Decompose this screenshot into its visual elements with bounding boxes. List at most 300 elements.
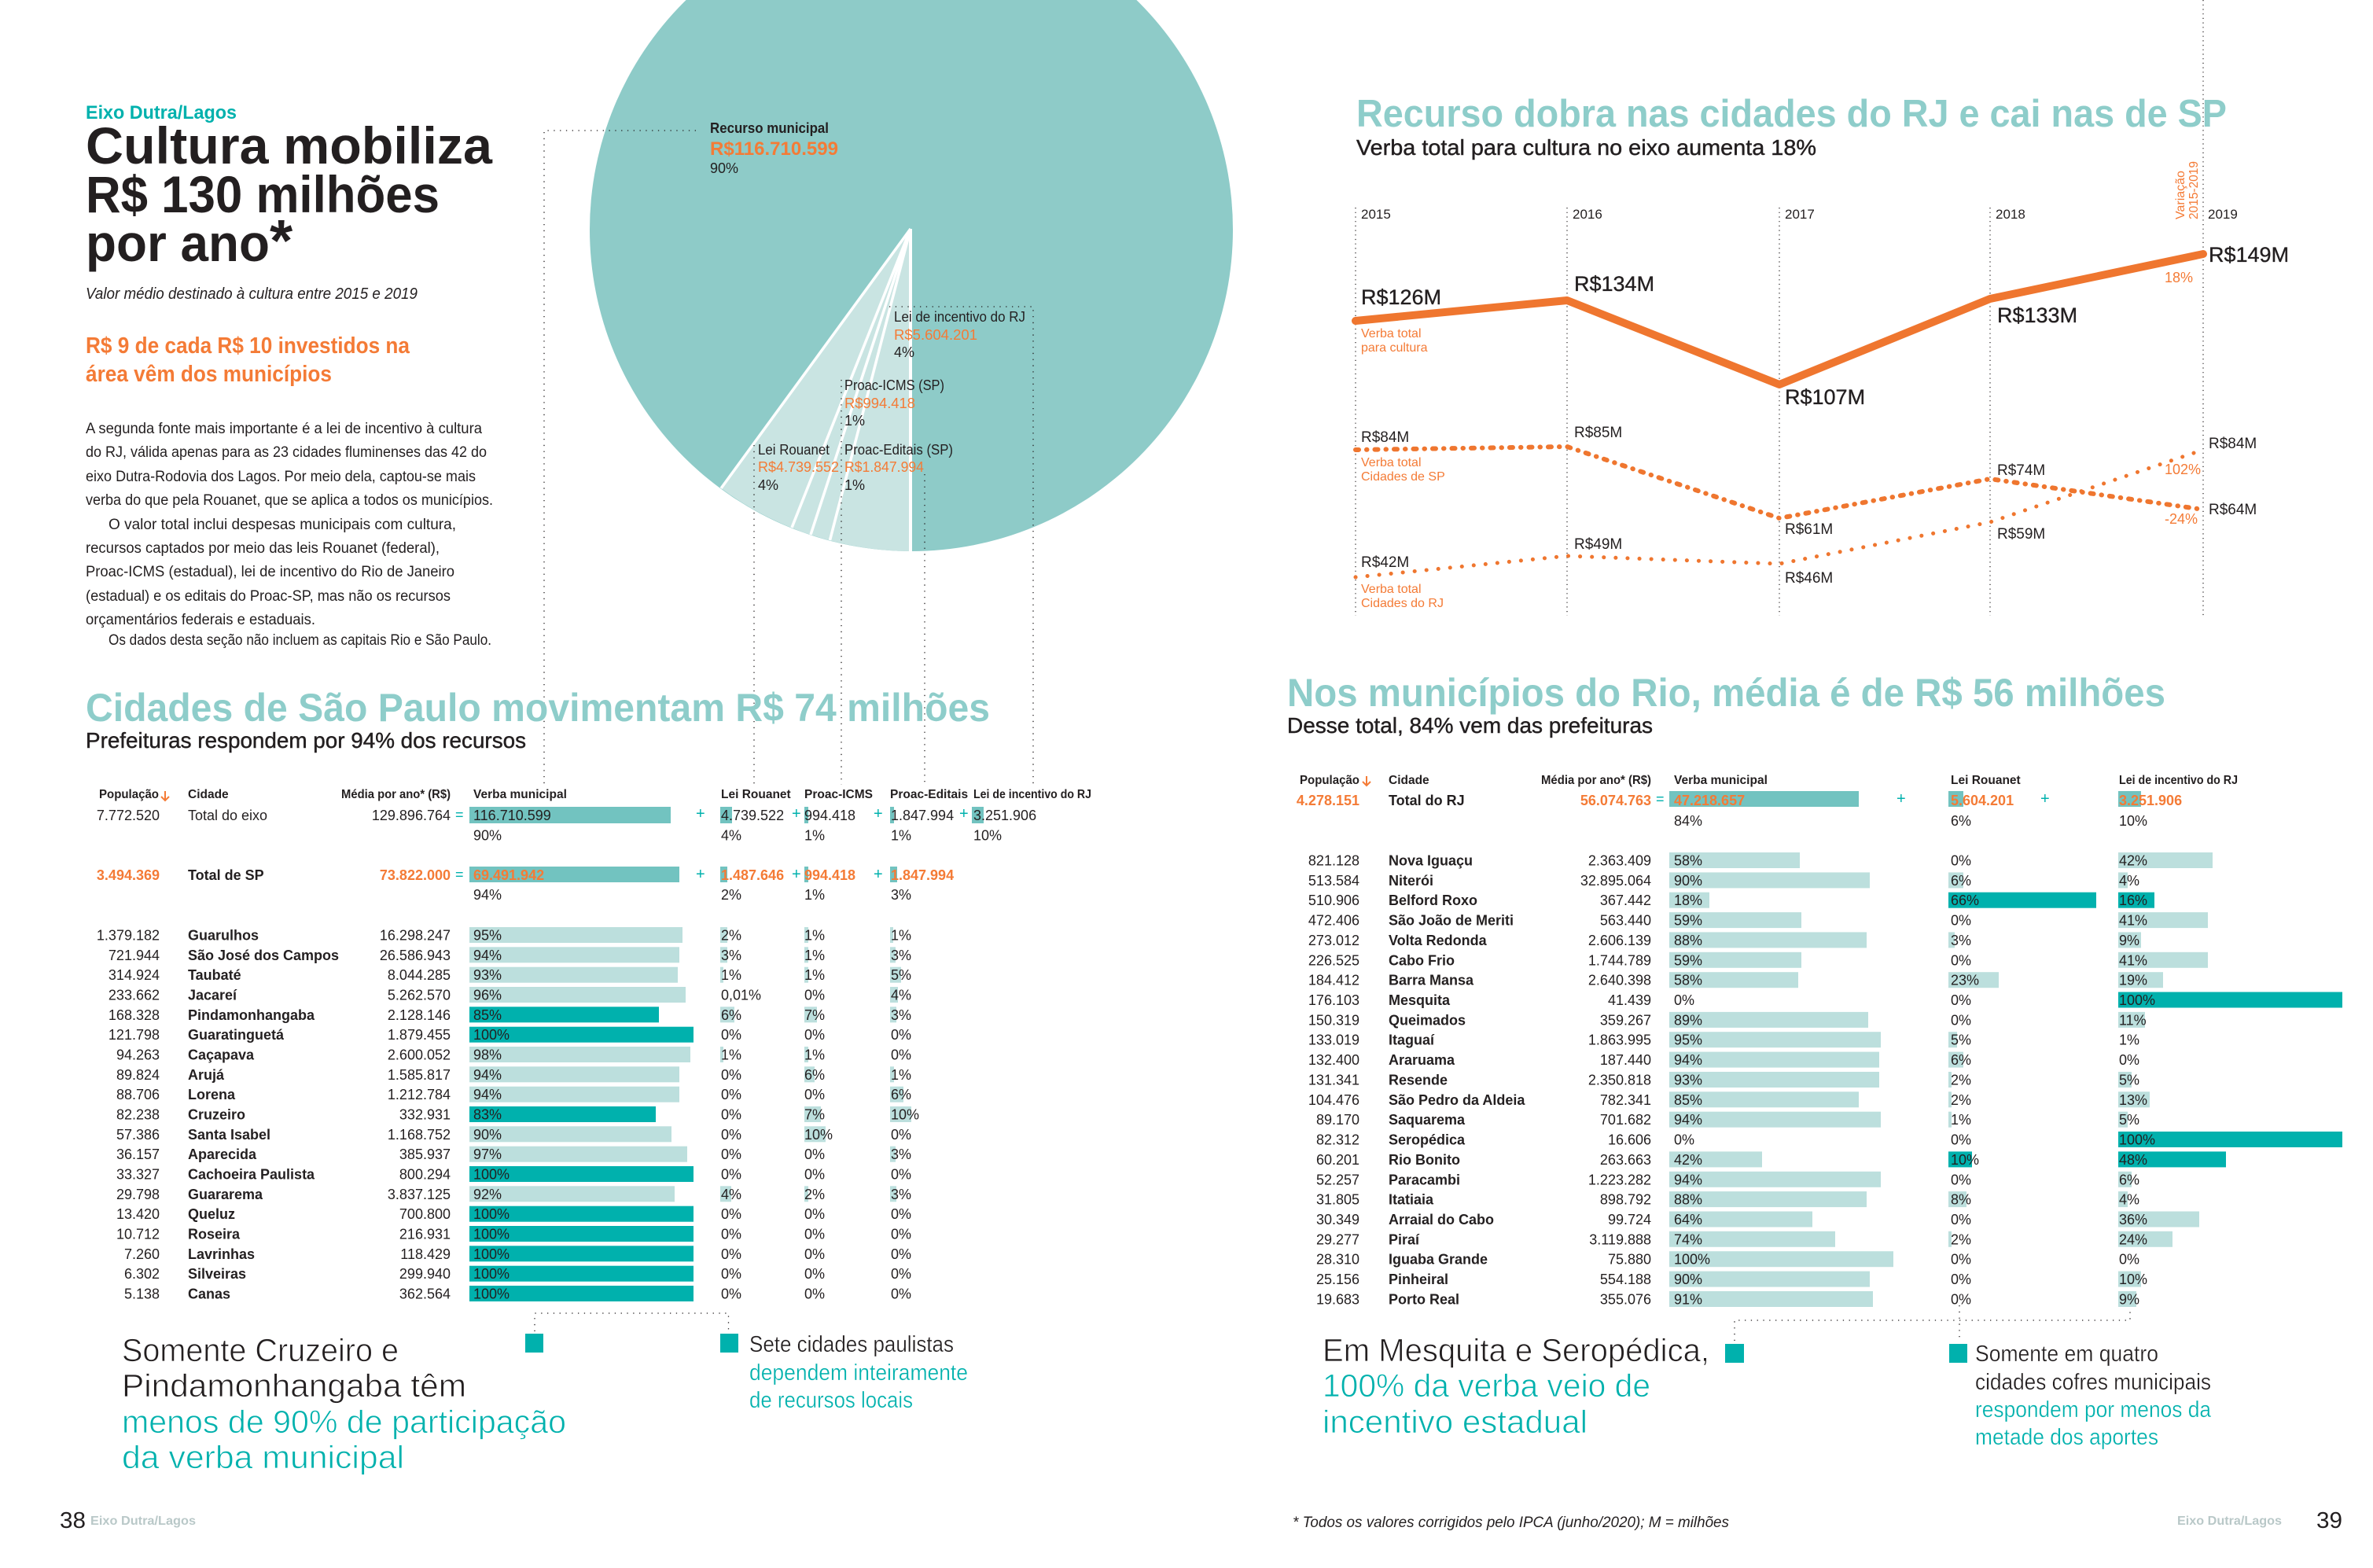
row: Santa Isabel: 1.168.752 xyxy=(388,1127,451,1143)
row: São João de Meriti: 563.440 xyxy=(1600,913,1651,929)
row: Itaguaí: 95% xyxy=(1674,1032,1702,1048)
row: total do eixo: + xyxy=(874,805,883,823)
pie label: Recurso municipal xyxy=(710,120,838,176)
row: Mesquita: 176.103 xyxy=(1308,992,1359,1008)
row: Arujá xyxy=(116,1066,911,1083)
row: Rio Bonito: 263.663 xyxy=(1600,1152,1651,1168)
series: cities of RJ: R$42M xyxy=(1361,554,1409,571)
pie label: Proac-Editais: 1% xyxy=(844,477,865,493)
table header: População xyxy=(99,788,159,801)
pie label: Lei de incentivo do RJ: R$5.604.201 xyxy=(894,327,977,343)
row: Paracambi: 6% xyxy=(2119,1172,2139,1187)
series: cities of RJ xyxy=(1356,436,2257,610)
footer right xyxy=(2177,1508,2342,1533)
pie label: Recurso municipal: Recurso municipal xyxy=(710,120,829,136)
row: Volta Redonda: 88% xyxy=(1674,933,1702,948)
row: Itatiaia: 4% xyxy=(2119,1192,2139,1208)
line chart: total funding 2015-2019 xyxy=(1356,0,2289,616)
row: Araruama: 0% xyxy=(2119,1052,2139,1068)
row: Araruama: Araruama xyxy=(1389,1052,1455,1068)
row: Roseira: 0% xyxy=(721,1227,741,1242)
row: total do RJ: 84% xyxy=(1674,813,1702,829)
row: Mesquita: 0% xyxy=(1674,992,1694,1008)
pie label: Recurso municipal: R$116.710.599 xyxy=(710,138,838,160)
footer left: 38 xyxy=(60,1508,86,1533)
row: Cruzeiro xyxy=(116,1106,919,1123)
callout: Somente em quatro cidades: metade dos aportes xyxy=(1975,1425,2158,1450)
row: total de SP: 1.847.994 xyxy=(891,867,954,883)
row: Porto Real: 19.683 xyxy=(1316,1291,1359,1307)
row: Nova Iguaçu: 821.128 xyxy=(1308,852,1359,868)
row: Barra Mansa: 184.412 xyxy=(1308,973,1359,988)
row: Arujá: 89.824 xyxy=(116,1067,160,1083)
series: cities of RJ: Cidades do RJ xyxy=(1361,597,1444,610)
pie label: Lei de incentivo do RJ: 4% xyxy=(894,344,914,360)
row: Rio Bonito: 60.201 xyxy=(1316,1152,1359,1168)
row: Piraí: Piraí xyxy=(1389,1231,1420,1247)
row: Queimados: 89% xyxy=(1674,1012,1702,1028)
row: Pinheiral: 554.188 xyxy=(1600,1272,1651,1287)
row: São José dos Campos xyxy=(109,947,911,963)
row: total de SP: = xyxy=(455,867,464,882)
row: Jacareí: 96% xyxy=(473,988,502,1003)
pie label: Lei Rouanet: R$4.739.552 xyxy=(758,459,839,475)
row: Queluz: 700.800 xyxy=(399,1206,451,1222)
callout: Sete cidades paulistas xyxy=(720,1332,968,1413)
row: Guarulhos: 1% xyxy=(804,928,825,944)
row: Nova Iguaçu: Nova Iguaçu xyxy=(1389,852,1473,868)
row: Taubaté: 1% xyxy=(804,967,825,983)
row: total do RJ xyxy=(1297,790,2182,829)
row: Iguaba Grande: 28.310 xyxy=(1316,1252,1359,1268)
row: total do eixo: 4.739.522 xyxy=(721,808,784,823)
row: total de SP: 994.418 xyxy=(804,867,855,883)
body text: recursos captados por meio das leis Rouanet (federal), xyxy=(86,540,440,557)
row: Guarulhos: 2% xyxy=(721,928,741,944)
row: Nova Iguaçu xyxy=(1308,852,2213,868)
row: total de SP: Total de SP xyxy=(188,867,264,883)
row: Saquarema: 5% xyxy=(2119,1112,2139,1128)
row: Iguaba Grande: 100% xyxy=(1674,1252,1710,1268)
row: Aparecida: Aparecida xyxy=(188,1147,257,1162)
row: Cachoeira Paulista: Cachoeira Paulista xyxy=(188,1167,315,1183)
year labels xyxy=(1361,207,2238,222)
row: São José dos Campos: 94% xyxy=(473,948,502,963)
row: Guaratinguetá: 0% xyxy=(804,1027,825,1043)
body text: Proac-ICMS (estadual), lei de incentivo do Rio de Janeiro xyxy=(86,564,454,580)
row: Lavrinhas: 100% xyxy=(473,1246,510,1262)
orange subheading xyxy=(86,333,410,387)
rotated label: variation: 2015-2019 xyxy=(2187,161,2201,219)
row: Resende xyxy=(1308,1072,2139,1088)
row: Rio Bonito: 48% xyxy=(2119,1152,2147,1168)
row: total de SP: 73.822.000 xyxy=(380,867,451,883)
row: Taubaté: 5% xyxy=(891,967,911,983)
row: Guaratinguetá: 100% xyxy=(473,1027,510,1043)
row: Cruzeiro: 332.931 xyxy=(399,1107,451,1123)
row: Mesquita: 100% xyxy=(2119,992,2155,1008)
table: São Paulo cities xyxy=(97,788,1091,1302)
row: Roseira: Roseira xyxy=(188,1227,241,1242)
row: Lorena: 6% xyxy=(891,1087,911,1102)
footnote: * Todos os valores corrigidos pelo IPCA (junho/2020); M = milhões xyxy=(1293,1515,1729,1531)
row: Canas: 0% xyxy=(804,1286,825,1302)
row: Canas: 362.564 xyxy=(399,1286,451,1302)
series: total: Verba total xyxy=(1361,327,1422,340)
row: São João de Meriti: 41% xyxy=(2119,913,2147,929)
row: Belford Roxo: 16% xyxy=(2119,893,2147,908)
row: Roseira: 0% xyxy=(891,1227,911,1242)
row: São Pedro da Aldeia: São Pedro da Aldeia xyxy=(1389,1092,1525,1108)
row: Pinheiral: Pinheiral xyxy=(1389,1272,1448,1287)
row: Araruama: 187.440 xyxy=(1600,1052,1651,1068)
row: total de SP: 1.487.646 xyxy=(721,867,784,883)
row: São José dos Campos: 3% xyxy=(891,948,911,963)
row: Pinheiral xyxy=(1316,1272,2147,1287)
row: Caçapava: 0% xyxy=(891,1047,911,1063)
row: Niterói: 6% xyxy=(1951,873,1971,889)
row: Porto Real: 355.076 xyxy=(1600,1291,1651,1307)
row: total do eixo: + xyxy=(696,805,705,823)
row: Itatiaia: 88% xyxy=(1674,1192,1702,1208)
row: Jacareí: 233.662 xyxy=(109,988,160,1003)
pie label: Proac-ICMS: 1% xyxy=(844,413,865,429)
row: Itaguaí xyxy=(1308,1032,2139,1048)
series: total: 18% xyxy=(2165,270,2193,285)
callout: Mesquita e Seropédica: Em Mesquita e Seropédica, xyxy=(1323,1332,1709,1368)
row: Saquarema: 94% xyxy=(1674,1112,1702,1128)
row: Jacareí: 0,01% xyxy=(721,988,761,1003)
row: Arujá: 1.585.817 xyxy=(388,1067,451,1083)
row: Volta Redonda: 3% xyxy=(1951,933,1971,948)
row: Lorena: 1.212.784 xyxy=(388,1087,451,1102)
row: Santa Isabel: 90% xyxy=(473,1127,502,1143)
row: Roseira: 216.931 xyxy=(399,1227,451,1242)
series: cities of RJ: R$59M xyxy=(1997,526,2045,543)
row: Guarulhos: 95% xyxy=(473,928,502,944)
row: Queluz: 0% xyxy=(804,1206,825,1222)
table header: Verba municipal xyxy=(473,788,567,801)
row: Arujá: Arujá xyxy=(188,1067,225,1083)
row: Caçapava: Caçapava xyxy=(188,1047,255,1063)
row: total do eixo: 4% xyxy=(721,827,741,843)
row: Paracambi xyxy=(1316,1172,2139,1187)
series: cities of SP: R$85M xyxy=(1574,425,1622,441)
row: Queimados: 0% xyxy=(1951,1012,1971,1028)
row: total do eixo: 7.772.520 xyxy=(97,808,160,823)
series: cities of SP: R$64M xyxy=(2209,502,2257,518)
row: Arujá: 94% xyxy=(473,1067,502,1083)
row: Cruzeiro: Cruzeiro xyxy=(188,1107,245,1123)
row: Cachoeira Paulista: 100% xyxy=(473,1167,510,1183)
row: total do eixo: 129.896.764 xyxy=(372,808,451,823)
row: Belford Roxo xyxy=(1308,893,2154,908)
row: Iguaba Grande: 0% xyxy=(1951,1252,1971,1268)
pie label: Proac-Editais xyxy=(844,442,953,493)
row: Resende: 131.341 xyxy=(1308,1073,1359,1088)
series: cities of RJ: 102% xyxy=(2165,462,2201,477)
row: Volta Redonda: Volta Redonda xyxy=(1389,933,1488,948)
title xyxy=(86,116,493,274)
table header xyxy=(99,788,1091,801)
pie label: Recurso municipal: 90% xyxy=(710,160,738,176)
row: Cruzeiro: 0% xyxy=(721,1107,741,1123)
row: Taubaté: Taubaté xyxy=(188,967,241,983)
row: Araruama: 6% xyxy=(1951,1052,1971,1068)
row: Mesquita: 0% xyxy=(1951,992,1971,1008)
row: total do eixo xyxy=(97,805,1036,843)
pie label: Proac-ICMS: R$994.418 xyxy=(844,396,915,411)
row: Cachoeira Paulista: 0% xyxy=(804,1167,825,1183)
row: Guararema: 29.798 xyxy=(116,1187,160,1202)
row: Belford Roxo: Belford Roxo xyxy=(1389,893,1477,908)
row: Iguaba Grande: 75.880 xyxy=(1608,1252,1651,1268)
row: Barra Mansa: Barra Mansa xyxy=(1389,973,1474,988)
row: Pindamonhangaba: 7% xyxy=(804,1007,825,1023)
row: Resende: 2.350.818 xyxy=(1588,1073,1651,1088)
row: Pindamonhangaba: 168.328 xyxy=(109,1007,160,1023)
footer left xyxy=(60,1508,196,1533)
series: total: R$107M xyxy=(1785,385,1865,409)
row: Paracambi: Paracambi xyxy=(1389,1172,1460,1187)
row: Piraí xyxy=(1316,1231,2172,1247)
title: por ano xyxy=(86,214,270,272)
callout: Somente em quatro cidades: cidades cofres municipais xyxy=(1975,1370,2211,1395)
row: total do RJ: + xyxy=(1897,790,1906,808)
callout: Cruzeiro e Pindamonhangaba: menos de 90% de participação xyxy=(122,1404,566,1440)
row: Jacareí xyxy=(109,987,911,1003)
row: total do eixo: 1% xyxy=(804,827,825,843)
table header: Proac-ICMS xyxy=(804,788,873,801)
series: cities of SP xyxy=(1356,425,2257,538)
row: Rio Bonito xyxy=(1316,1151,2226,1168)
row: total de SP: + xyxy=(874,866,883,883)
row: Guararema xyxy=(116,1186,911,1202)
row: Guaratinguetá: 0% xyxy=(891,1027,911,1043)
row: Porto Real: 91% xyxy=(1674,1291,1702,1307)
row: Pindamonhangaba xyxy=(109,1007,911,1023)
callout: Sete cidades paulistas: de recursos locais xyxy=(749,1388,913,1413)
pie label: Proac-ICMS xyxy=(844,377,944,429)
row: Nova Iguaçu: 58% xyxy=(1674,852,1702,868)
subheading: São Paulo: Prefeituras respondem por 94% dos recursos xyxy=(86,728,526,753)
row: Taubaté xyxy=(109,967,911,983)
series: total xyxy=(1356,243,2289,409)
row: Guararema: 3% xyxy=(891,1187,911,1202)
row: Roseira: 100% xyxy=(473,1227,510,1242)
table header: Verba municipal xyxy=(1674,774,1768,787)
row: Guaratinguetá: 0% xyxy=(721,1027,741,1043)
row: Silveiras: 0% xyxy=(804,1266,825,1282)
row: total do eixo: 10% xyxy=(973,827,1002,843)
heading: São Paulo: Cidades de São Paulo movimentam R$ 74 milhões xyxy=(86,686,990,730)
row: Santa Isabel: 10% xyxy=(804,1127,833,1143)
series: total: para cultura xyxy=(1361,341,1428,355)
row: Taubaté: 8.044.285 xyxy=(388,967,451,983)
row: Pindamonhangaba: Pindamonhangaba xyxy=(188,1007,315,1023)
row: Resende: Resende xyxy=(1389,1073,1448,1088)
row: total do RJ: + xyxy=(2040,790,2050,808)
row: Queluz: 13.420 xyxy=(116,1206,160,1222)
row: Araruama xyxy=(1308,1052,2139,1068)
row: Jacareí: Jacareí xyxy=(188,988,237,1003)
row: Volta Redonda: 2.606.139 xyxy=(1588,933,1651,948)
year labels: 2016 xyxy=(1573,207,1602,222)
row: São José dos Campos: 3% xyxy=(721,948,741,963)
row: São Pedro da Aldeia: 85% xyxy=(1674,1092,1702,1108)
table header xyxy=(1300,774,2238,787)
row: Itaguaí: Itaguaí xyxy=(1389,1032,1435,1048)
row: total do eixo: = xyxy=(455,807,464,823)
row: Belford Roxo: 66% xyxy=(1951,893,1979,908)
row: Itaguaí: 1% xyxy=(2119,1032,2139,1048)
row: Pinheiral: 0% xyxy=(1951,1272,1971,1287)
row: Queluz: Queluz xyxy=(188,1206,235,1222)
table header: Lei de incentivo do RJ xyxy=(2119,774,2238,787)
row: Cruzeiro: 7% xyxy=(804,1107,825,1123)
row: Iguaba Grande: 0% xyxy=(2119,1252,2139,1268)
row: Mesquita xyxy=(1308,992,2342,1008)
row: total de SP: 1% xyxy=(804,887,825,903)
series: cities of SP: R$74M xyxy=(1997,462,2045,479)
row: total do RJ: Total do RJ xyxy=(1389,793,1465,808)
year labels: 2015 xyxy=(1361,207,1391,222)
row: Itatiaia: Itatiaia xyxy=(1389,1192,1434,1208)
row: Santa Isabel: 57.386 xyxy=(116,1127,160,1143)
row: Nova Iguaçu: 2.363.409 xyxy=(1588,852,1651,868)
row: Aparecida: 0% xyxy=(804,1147,825,1162)
body text: eixo Dutra-Rodovia dos Lagos. Por meio dela, captou-se mais xyxy=(86,469,476,485)
row: São José dos Campos: 26.586.943 xyxy=(380,948,451,963)
row: Nova Iguaçu: 0% xyxy=(1951,852,1971,868)
row: Iguaba Grande xyxy=(1316,1251,2139,1268)
row: Aparecida: 3% xyxy=(891,1147,911,1162)
row: São José dos Campos: São José dos Campos xyxy=(188,948,339,963)
row: Cachoeira Paulista: 33.327 xyxy=(116,1167,160,1183)
row: Belford Roxo: 367.442 xyxy=(1600,893,1651,908)
row: Cruzeiro: 82.238 xyxy=(116,1107,160,1123)
row: Caçapava xyxy=(116,1047,911,1063)
row: Porto Real xyxy=(1316,1291,2139,1307)
row: total do RJ: 3.251.906 xyxy=(2119,793,2182,808)
row: Taubaté: 1% xyxy=(721,967,741,983)
row: Niterói: Niterói xyxy=(1389,873,1433,889)
row: total do RJ: 47.218.657 xyxy=(1674,793,1745,808)
row: Caçapava: 2.600.052 xyxy=(388,1047,451,1063)
series: cities of SP: -24% xyxy=(2165,511,2198,527)
pie chart: funding sources xyxy=(590,0,1233,552)
row: Lavrinhas: 0% xyxy=(804,1246,825,1262)
row: São João de Meriti: São João de Meriti xyxy=(1389,913,1514,929)
row: Canas: Canas xyxy=(188,1286,230,1302)
row: Itaguaí: 5% xyxy=(1951,1032,1971,1048)
row: Canas: 0% xyxy=(721,1286,741,1302)
title: Cultura mobiliza xyxy=(86,116,493,175)
row: Silveiras: 100% xyxy=(473,1266,510,1282)
body text xyxy=(86,421,493,649)
row: Seropédica: 0% xyxy=(1674,1132,1694,1148)
row: Belford Roxo: 18% xyxy=(1674,893,1702,908)
row: Belford Roxo: 510.906 xyxy=(1308,893,1359,908)
row: Seropédica: 82.312 xyxy=(1316,1132,1359,1148)
row: Guarulhos: 16.298.247 xyxy=(380,928,451,944)
year labels: 2019 xyxy=(2208,207,2238,222)
row: total do RJ: = xyxy=(1656,791,1665,807)
row: total do eixo: 1.847.994 xyxy=(891,808,954,823)
row: Queluz: 100% xyxy=(473,1206,510,1222)
row: total do eixo: Total do eixo xyxy=(188,808,267,823)
row: Arraial do Cabo: 36% xyxy=(2119,1212,2147,1228)
row: Niterói: 90% xyxy=(1674,873,1702,889)
row: São Pedro da Aldeia xyxy=(1308,1091,2150,1108)
row: total de SP: 3.494.369 xyxy=(97,867,160,883)
row: Porto Real: 9% xyxy=(2119,1291,2139,1307)
pie label: Proac-Editais: Proac-Editais (SP) xyxy=(844,442,953,458)
row: Volta Redonda: 273.012 xyxy=(1308,933,1359,948)
row: Guararema: 92% xyxy=(473,1187,502,1202)
row: Cachoeira Paulista xyxy=(116,1166,911,1183)
body text: orçamentários federais e estaduais. xyxy=(86,612,315,628)
callout: Cruzeiro e Pindamonhangaba xyxy=(122,1332,566,1475)
row: Itatiaia: 31.805 xyxy=(1316,1192,1359,1208)
series: cities of SP: R$84M xyxy=(1361,429,1409,446)
pie label: Proac-Editais: R$1.847.994 xyxy=(844,459,924,475)
table header: Lei Rouanet xyxy=(721,788,791,801)
row: Pindamonhangaba: 2.128.146 xyxy=(388,1007,451,1023)
row: Santa Isabel: 0% xyxy=(721,1127,741,1143)
row: total de SP: 94% xyxy=(473,887,502,903)
footer right: Eixo Dutra/Lagos xyxy=(2177,1515,2282,1528)
row: Barra Mansa: 23% xyxy=(1951,973,1979,988)
row: total do RJ: 10% xyxy=(2119,813,2147,829)
body text: O valor total inclui despesas municipais com cultura, xyxy=(109,517,456,533)
row: Guararema: Guararema xyxy=(188,1187,263,1202)
series: cities of SP: R$61M xyxy=(1785,521,1833,538)
row: Niterói: 4% xyxy=(2119,873,2139,889)
row: Arraial do Cabo: 0% xyxy=(1951,1212,1971,1228)
row: Cachoeira Paulista: 800.294 xyxy=(399,1167,451,1183)
row: total do eixo: + xyxy=(792,805,801,823)
callout: Cruzeiro e Pindamonhangaba: da verba municipal xyxy=(122,1439,404,1475)
legend square: Mesquita callout xyxy=(1725,1344,1744,1363)
row: Cruzeiro: 10% xyxy=(891,1107,919,1123)
row: São Pedro da Aldeia: 2% xyxy=(1951,1092,1971,1108)
row: Caçapava: 1% xyxy=(721,1047,741,1063)
year labels: 2018 xyxy=(1996,207,2025,222)
row: Volta Redonda xyxy=(1308,932,2141,948)
row: Resende: 5% xyxy=(2119,1073,2139,1088)
row: Pindamonhangaba: 85% xyxy=(473,1007,502,1023)
row: Pindamonhangaba: 6% xyxy=(721,1007,741,1023)
row: Rio Bonito: 42% xyxy=(1674,1152,1702,1168)
row: Rio Bonito: 10% xyxy=(1951,1152,1979,1168)
row: Porto Real: 0% xyxy=(1951,1291,1971,1307)
row: Jacareí: 4% xyxy=(891,988,911,1003)
row: Queimados: 11% xyxy=(2119,1012,2147,1028)
row: Seropédica: 16.606 xyxy=(1608,1132,1651,1148)
row: Pinheiral: 90% xyxy=(1674,1272,1702,1287)
row: Mesquita: 41.439 xyxy=(1608,992,1651,1008)
row: Jacareí: 5.262.570 xyxy=(388,988,451,1003)
series: total: R$133M xyxy=(1997,304,2077,327)
row: Guararema: 2% xyxy=(804,1187,825,1202)
row: Resende: 93% xyxy=(1674,1073,1702,1088)
row: Itatiaia: 898.792 xyxy=(1600,1192,1651,1208)
rotated label: variation xyxy=(2174,161,2201,219)
row: Saquarema xyxy=(1316,1112,2139,1128)
row: Niterói xyxy=(1308,872,2139,889)
row: Canas: 5.138 xyxy=(124,1286,160,1302)
